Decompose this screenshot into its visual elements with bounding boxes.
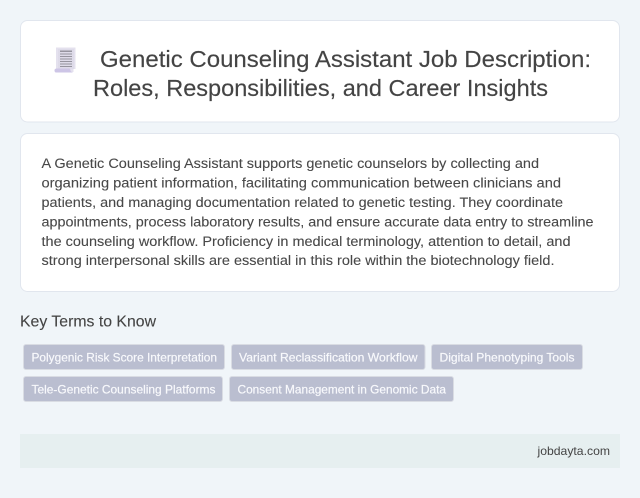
tag: tele-genetic counseling: Tele-Genetic Counseling Platforms xyxy=(32,382,216,396)
title xyxy=(93,46,591,101)
tag: digital phenotyping: Digital Phenotyping Tools xyxy=(440,350,574,364)
description text: organizing patient information, facilitating communication between clinicians and xyxy=(42,175,561,191)
description text xyxy=(42,156,594,269)
description text: patients, and managing documentation related to genetic testing. They coordinate xyxy=(42,195,563,211)
tag: consent management xyxy=(230,376,454,402)
description text: appointments, process laboratory results, and ensure accurate data entry to streamline xyxy=(42,214,594,230)
heading: key terms: Key Terms to Know xyxy=(20,314,156,330)
panel: description card xyxy=(20,134,620,292)
tag: tele-genetic counseling xyxy=(24,376,222,402)
description text: the counseling workflow. Proficiency in medical terminology, attention to detail, and xyxy=(42,234,570,250)
tags: key terms xyxy=(24,344,582,402)
icon: document scroll xyxy=(54,48,76,72)
tag: polygenic risk score: Polygenic Risk Score Interpretation xyxy=(32,350,217,364)
tag: variant reclassification xyxy=(232,344,425,370)
tag: consent management: Consent Management in Genomic Data xyxy=(238,382,446,396)
description text: A Genetic Counseling Assistant supports genetic counselors by collecting and xyxy=(42,156,539,172)
footer bar xyxy=(20,434,620,468)
footer bar: jobdayta.com xyxy=(536,444,610,458)
title: Roles, Responsibilities, and Career Insights xyxy=(93,75,548,101)
tag: variant reclassification: Variant Reclassification Workflow xyxy=(239,350,418,364)
tag: digital phenotyping xyxy=(432,344,582,370)
description text: strong interpersonal skills are essential in this role within the biotechnology field. xyxy=(42,253,554,269)
tag: polygenic risk score xyxy=(24,344,224,370)
title: Genetic Counseling Assistant Job Description: xyxy=(100,46,591,72)
panel: title card xyxy=(20,20,620,122)
